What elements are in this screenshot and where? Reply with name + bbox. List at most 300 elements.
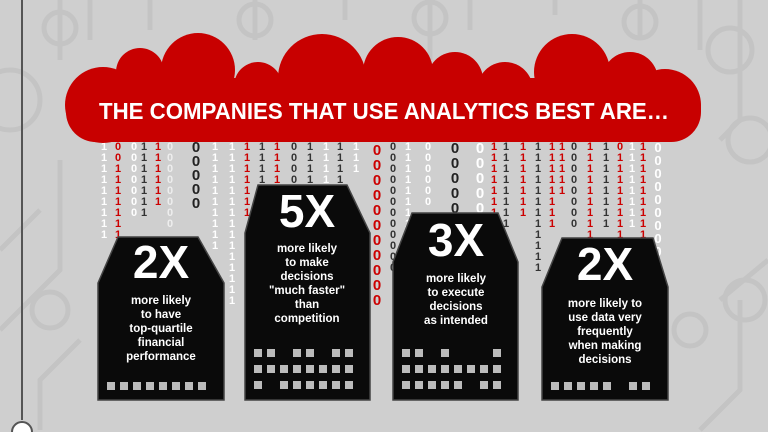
binary rain: 0: [571, 207, 577, 219]
binary rain: 1: [587, 141, 593, 153]
binary rain: 0: [390, 229, 396, 241]
binary rain: 0: [654, 270, 662, 285]
binary rain: 1: [617, 163, 623, 175]
box 1: 2X financial performance: 2X: [133, 236, 189, 288]
binary rain: 0: [373, 217, 381, 234]
binary rain: 0: [571, 185, 577, 197]
binary rain: 0: [131, 207, 137, 219]
binary rain: 1: [244, 152, 250, 164]
binary rain: 1: [244, 185, 250, 197]
binary rain: 1: [535, 218, 541, 230]
binary rain: 0: [654, 153, 662, 168]
binary rain: 1: [229, 262, 235, 274]
binary rain: 1: [491, 196, 497, 208]
binary rain: 1: [549, 207, 555, 219]
binary rain: 0: [167, 185, 173, 197]
binary rain: 0: [390, 262, 396, 274]
binary rain: 1: [491, 152, 497, 164]
binary rain: 1: [115, 174, 121, 186]
binary rain: 1: [503, 152, 509, 164]
binary rain: 1: [629, 207, 635, 219]
binary rain: 1: [115, 196, 121, 208]
binary rain: 0: [167, 207, 173, 219]
binary rain: 1: [405, 218, 411, 230]
binary rain: 0: [291, 152, 297, 164]
binary rain: 1: [520, 141, 526, 153]
binary rain: 1: [244, 163, 250, 175]
binary rain: 1: [101, 218, 107, 230]
binary rain: 0: [451, 140, 459, 157]
binary rain: 0: [476, 170, 484, 187]
binary rain: 1: [535, 185, 541, 197]
binary rain: 0: [192, 167, 200, 184]
binary rain: 1: [141, 152, 147, 164]
binary rain: 1: [629, 218, 635, 230]
binary rain: 1: [559, 163, 565, 175]
binary rain: 1: [503, 185, 509, 197]
box 1: 2X financial performance: more likely: [131, 295, 192, 307]
binary rain: 0: [425, 163, 431, 175]
binary rain: 0: [390, 207, 396, 219]
binary rain: 1: [353, 141, 359, 153]
binary rain: 1: [307, 152, 313, 164]
binary rain: 1: [244, 141, 250, 153]
binary rain: 1: [141, 207, 147, 219]
binary rain: 0: [451, 200, 459, 217]
binary rain: 0: [131, 141, 137, 153]
binary rain: 1: [212, 207, 218, 219]
binary rain: 0: [617, 141, 623, 153]
binary rain: 0: [654, 218, 662, 233]
binary rain: 0: [131, 174, 137, 186]
binary rain: 1: [155, 152, 161, 164]
binary rain: 1: [101, 152, 107, 164]
binary rain: 1: [323, 141, 329, 153]
binary rain: 0: [390, 174, 396, 186]
binary rain: 1: [629, 152, 635, 164]
binary rain: 1: [212, 229, 218, 241]
binary rain: 0: [373, 262, 381, 279]
binary rain: 1: [559, 174, 565, 186]
binary rain: 1: [155, 185, 161, 197]
binary rain: 1: [274, 141, 280, 153]
cloud banner: [65, 33, 701, 143]
binary rain: 0: [373, 187, 381, 204]
binary rain: 1: [259, 141, 265, 153]
binary rain: 1: [603, 163, 609, 175]
binary rain: 1: [535, 141, 541, 153]
binary rain: 1: [229, 240, 235, 252]
box 4: 2X use data frequently: [542, 238, 668, 400]
binary rain: 0: [167, 174, 173, 186]
binary rain: 1: [244, 174, 250, 186]
box 2: 5X decisions faster: more likely: [277, 243, 338, 255]
binary rain: 0: [192, 195, 200, 212]
binary rain: 0: [390, 196, 396, 208]
binary rain: 1: [520, 207, 526, 219]
binary rain: 1: [640, 152, 646, 164]
binary rain: 1: [307, 141, 313, 153]
binary rain: 1: [491, 163, 497, 175]
binary rain: 1: [603, 185, 609, 197]
binary rain: 1: [229, 229, 235, 241]
binary rain: 1: [212, 218, 218, 230]
binary rain: 1: [503, 141, 509, 153]
box 3: 3X execute decisions: decisions: [429, 301, 483, 313]
binary rain: 0: [390, 163, 396, 175]
binary rain: 1: [337, 174, 343, 186]
box 3: 3X execute decisions: 3X: [428, 214, 484, 266]
binary rain: 0: [390, 251, 396, 263]
box 4: 2X use data frequently: frequently: [577, 326, 633, 338]
binary rain: 0: [192, 181, 200, 198]
binary rain: 1: [520, 174, 526, 186]
binary rain: 0: [167, 152, 173, 164]
binary rain: 1: [155, 141, 161, 153]
binary rain: 0: [571, 163, 577, 175]
binary rain: 0: [654, 192, 662, 207]
binary rain: 1: [101, 196, 107, 208]
binary rain: 1: [259, 174, 265, 186]
binary rain: 1: [535, 174, 541, 186]
binary rain: 1: [549, 218, 555, 230]
binary rain: 1: [274, 163, 280, 175]
box 3: 3X execute decisions: as intended: [424, 315, 488, 327]
box 2: 5X decisions faster: "much faster": [269, 285, 345, 297]
binary rain: 1: [617, 185, 623, 197]
binary rain: 1: [337, 141, 343, 153]
binary rain: 1: [587, 207, 593, 219]
binary rain: 1: [559, 185, 565, 197]
box 3: 3X execute decisions: [393, 213, 518, 400]
binary rain: 0: [373, 202, 381, 219]
binary rain: 1: [640, 251, 646, 263]
binary rain: 1: [503, 196, 509, 208]
binary rain: 1: [229, 273, 235, 285]
binary rain: 0: [571, 174, 577, 186]
binary rain: 1: [587, 163, 593, 175]
binary rain: 1: [549, 141, 555, 153]
binary rain: 1: [640, 207, 646, 219]
binary rain: 0: [373, 247, 381, 264]
binary rain: 1: [244, 207, 250, 219]
binary rain: 0: [115, 141, 121, 153]
binary rain: 0: [373, 157, 381, 174]
binary rain: 0: [115, 152, 121, 164]
binary rain: 0: [571, 218, 577, 230]
binary rain: 1: [141, 141, 147, 153]
title: THE COMPANIES THAT USE ANALYTICS BEST ARE…: [99, 98, 669, 124]
binary rain: 1: [229, 152, 235, 164]
binary rain: 1: [587, 229, 593, 241]
binary rain: 0: [476, 140, 484, 157]
binary rain: 1: [155, 163, 161, 175]
binary rain: 0: [654, 166, 662, 181]
binary rain: 1: [155, 174, 161, 186]
binary rain: 1: [617, 174, 623, 186]
binary rain: 1: [549, 185, 555, 197]
binary rain: 1: [503, 207, 509, 219]
binary rain: 1: [229, 295, 235, 307]
binary rain: 0: [390, 141, 396, 153]
binary rain: 1: [491, 174, 497, 186]
binary rain: 1: [549, 196, 555, 208]
binary rain: 1: [549, 152, 555, 164]
binary rain: 0: [291, 141, 297, 153]
binary rain: 0: [390, 218, 396, 230]
binary rain: 1: [101, 174, 107, 186]
box 4: 2X use data frequently: when making: [568, 340, 641, 352]
binary rain: 0: [654, 179, 662, 194]
binary rain: 1: [603, 218, 609, 230]
binary rain: 1: [640, 141, 646, 153]
binary rain: 1: [520, 152, 526, 164]
binary rain: 1: [229, 207, 235, 219]
binary rain: 0: [192, 139, 200, 156]
binary rain: 1: [155, 196, 161, 208]
binary rain: 1: [617, 229, 623, 241]
binary rain: 1: [603, 174, 609, 186]
binary rain: 1: [603, 152, 609, 164]
binary rain: 1: [535, 229, 541, 241]
binary rain: 1: [229, 174, 235, 186]
binary rain: 0: [425, 152, 431, 164]
binary rain: 0: [291, 174, 297, 186]
binary rain: 1: [603, 196, 609, 208]
binary rain: 1: [535, 152, 541, 164]
binary rain: 1: [640, 163, 646, 175]
binary rain: 1: [549, 163, 555, 175]
binary rain: 0: [654, 283, 662, 298]
binary rain: 1: [405, 163, 411, 175]
binary rain: 1: [405, 141, 411, 153]
binary rain: 0: [451, 185, 459, 202]
binary rain: 1: [405, 152, 411, 164]
binary rain: 1: [229, 163, 235, 175]
binary rain: 1: [141, 174, 147, 186]
binary rain: 1: [115, 229, 121, 241]
binary rain: 1: [587, 152, 593, 164]
binary rain: 1: [503, 218, 509, 230]
binary rain: 1: [323, 174, 329, 186]
binary rain: 1: [587, 196, 593, 208]
binary rain: 1: [617, 218, 623, 230]
binary rain: 0: [373, 142, 381, 159]
binary rain: 1: [629, 174, 635, 186]
binary rain: 1: [640, 240, 646, 252]
binary rain: 1: [640, 229, 646, 241]
binary rain: 0: [654, 140, 662, 155]
box 2: 5X decisions faster: decisions: [280, 271, 334, 283]
box 1: 2X financial performance: to have: [141, 309, 181, 321]
binary rain: 0: [167, 141, 173, 153]
binary rain: 0: [654, 244, 662, 259]
binary rain: 0: [654, 205, 662, 220]
binary rain: 0: [654, 257, 662, 272]
binary rain: 1: [141, 185, 147, 197]
binary rain: 0: [167, 196, 173, 208]
binary rain: 1: [115, 185, 121, 197]
binary rain: 1: [274, 152, 280, 164]
binary rain: 1: [405, 185, 411, 197]
box 1: 2X financial performance: financial: [138, 337, 184, 349]
binary rain: 1: [640, 218, 646, 230]
binary rain: 1: [520, 163, 526, 175]
binary rain: 1: [101, 163, 107, 175]
binary rain: 1: [520, 185, 526, 197]
binary rain: 1: [617, 152, 623, 164]
binary rain: 0: [451, 155, 459, 172]
binary rain: 1: [503, 174, 509, 186]
binary rain: 1: [115, 218, 121, 230]
binary rain: 0: [425, 174, 431, 186]
binary rain: 1: [535, 240, 541, 252]
binary rain: 1: [640, 196, 646, 208]
binary rain: 1: [229, 218, 235, 230]
binary rain: 1: [229, 196, 235, 208]
binary rain: 1: [307, 174, 313, 186]
box 1: 2X financial performance: top-quartile: [129, 323, 193, 335]
binary rain: 1: [405, 174, 411, 186]
box 2: 5X decisions faster: to make: [285, 257, 329, 269]
box 2: 5X decisions faster: competition: [274, 313, 340, 325]
binary rain: 0: [390, 152, 396, 164]
binary rain: 0: [373, 277, 381, 294]
binary rain: 0: [654, 231, 662, 246]
binary rain: 1: [353, 152, 359, 164]
binary rain: 0: [571, 141, 577, 153]
binary rain: 1: [229, 141, 235, 153]
binary rain: 1: [520, 196, 526, 208]
binary rain: 1: [559, 152, 565, 164]
binary rain: 1: [212, 240, 218, 252]
binary rain: 0: [192, 153, 200, 170]
binary rain: 1: [549, 174, 555, 186]
binary rain: 1: [491, 141, 497, 153]
binary rain: 1: [337, 163, 343, 175]
binary rain: 1: [323, 163, 329, 175]
binary rain: 1: [603, 207, 609, 219]
binary rain: 1: [629, 185, 635, 197]
binary rain: 0: [373, 172, 381, 189]
binary rain: 1: [587, 218, 593, 230]
binary rain: 1: [617, 196, 623, 208]
binary rain: 0: [373, 232, 381, 249]
binary rain: 1: [617, 240, 623, 252]
binary rain: 1: [535, 251, 541, 263]
box 4: 2X use data frequently: use data very: [568, 312, 642, 324]
binary rain: 1: [101, 141, 107, 153]
binary rain: 0: [476, 185, 484, 202]
binary rain: 1: [535, 207, 541, 219]
binary rain: 1: [259, 152, 265, 164]
binary rain: 0: [571, 196, 577, 208]
binary rain: 1: [640, 185, 646, 197]
binary rain: 1: [229, 284, 235, 296]
binary rain: 1: [141, 163, 147, 175]
box 4: 2X use data frequently: 2X: [577, 238, 633, 290]
binary rain: 1: [535, 196, 541, 208]
binary rain: 1: [212, 152, 218, 164]
binary rain: 0: [425, 185, 431, 197]
binary rain: 0: [425, 196, 431, 208]
binary rain: 1: [212, 141, 218, 153]
binary rain: 1: [617, 207, 623, 219]
binary rain: 1: [259, 163, 265, 175]
binary rain: 1: [603, 141, 609, 153]
binary rain: 1: [629, 141, 635, 153]
binary rain: 1: [640, 174, 646, 186]
binary rain: 1: [323, 152, 329, 164]
binary rain: 1: [629, 163, 635, 175]
binary rain: 0: [131, 185, 137, 197]
binary rain: 1: [405, 207, 411, 219]
binary rain: 1: [115, 207, 121, 219]
binary rain: 1: [229, 251, 235, 263]
binary rain: 0: [390, 240, 396, 252]
binary rain: 1: [491, 207, 497, 219]
box 1: 2X financial performance: [98, 236, 224, 400]
binary rain: [101, 139, 662, 309]
binary rain: 1: [535, 163, 541, 175]
binary rain: 1: [587, 174, 593, 186]
binary rain: 1: [535, 262, 541, 274]
box 2: 5X decisions faster: [245, 185, 370, 400]
binary rain: 1: [587, 185, 593, 197]
binary rain: 1: [101, 207, 107, 219]
binary rain: 1: [212, 174, 218, 186]
binary rain: 1: [491, 185, 497, 197]
box 3: 3X execute decisions: more likely: [426, 273, 487, 285]
binary rain: 1: [503, 163, 509, 175]
box 4: 2X use data frequently: more likely to: [568, 298, 642, 310]
binary rain: 0: [131, 163, 137, 175]
binary rain: 1: [141, 196, 147, 208]
binary rain: 1: [115, 163, 121, 175]
binary rain: 0: [571, 152, 577, 164]
binary rain: 0: [167, 163, 173, 175]
binary rain: 1: [405, 196, 411, 208]
binary rain: 1: [212, 196, 218, 208]
binary rain: 1: [212, 163, 218, 175]
box 2: 5X decisions faster: 5X: [279, 185, 335, 237]
binary rain: 1: [101, 185, 107, 197]
binary rain: 1: [101, 229, 107, 241]
binary rain: 0: [291, 163, 297, 175]
binary rain: 1: [229, 185, 235, 197]
binary rain: 0: [167, 218, 173, 230]
binary rain: 1: [307, 163, 313, 175]
binary rain: 1: [629, 196, 635, 208]
binary rain: 1: [244, 196, 250, 208]
binary rain: 0: [390, 185, 396, 197]
binary rain: 1: [353, 163, 359, 175]
binary rain: 0: [425, 141, 431, 153]
binary rain: 1: [337, 152, 343, 164]
box 2: 5X decisions faster: than: [295, 299, 319, 311]
binary rain: 0: [476, 155, 484, 172]
binary rain: 1: [559, 141, 565, 153]
box 1: 2X financial performance: performance: [126, 351, 196, 363]
binary rain: 0: [373, 292, 381, 309]
binary rain: 0: [131, 152, 137, 164]
binary rain: 1: [274, 174, 280, 186]
binary rain: 0: [451, 170, 459, 187]
box 3: 3X execute decisions: to execute: [428, 287, 484, 299]
binary rain: 1: [212, 185, 218, 197]
binary rain: 0: [476, 200, 484, 217]
binary rain: 0: [131, 196, 137, 208]
